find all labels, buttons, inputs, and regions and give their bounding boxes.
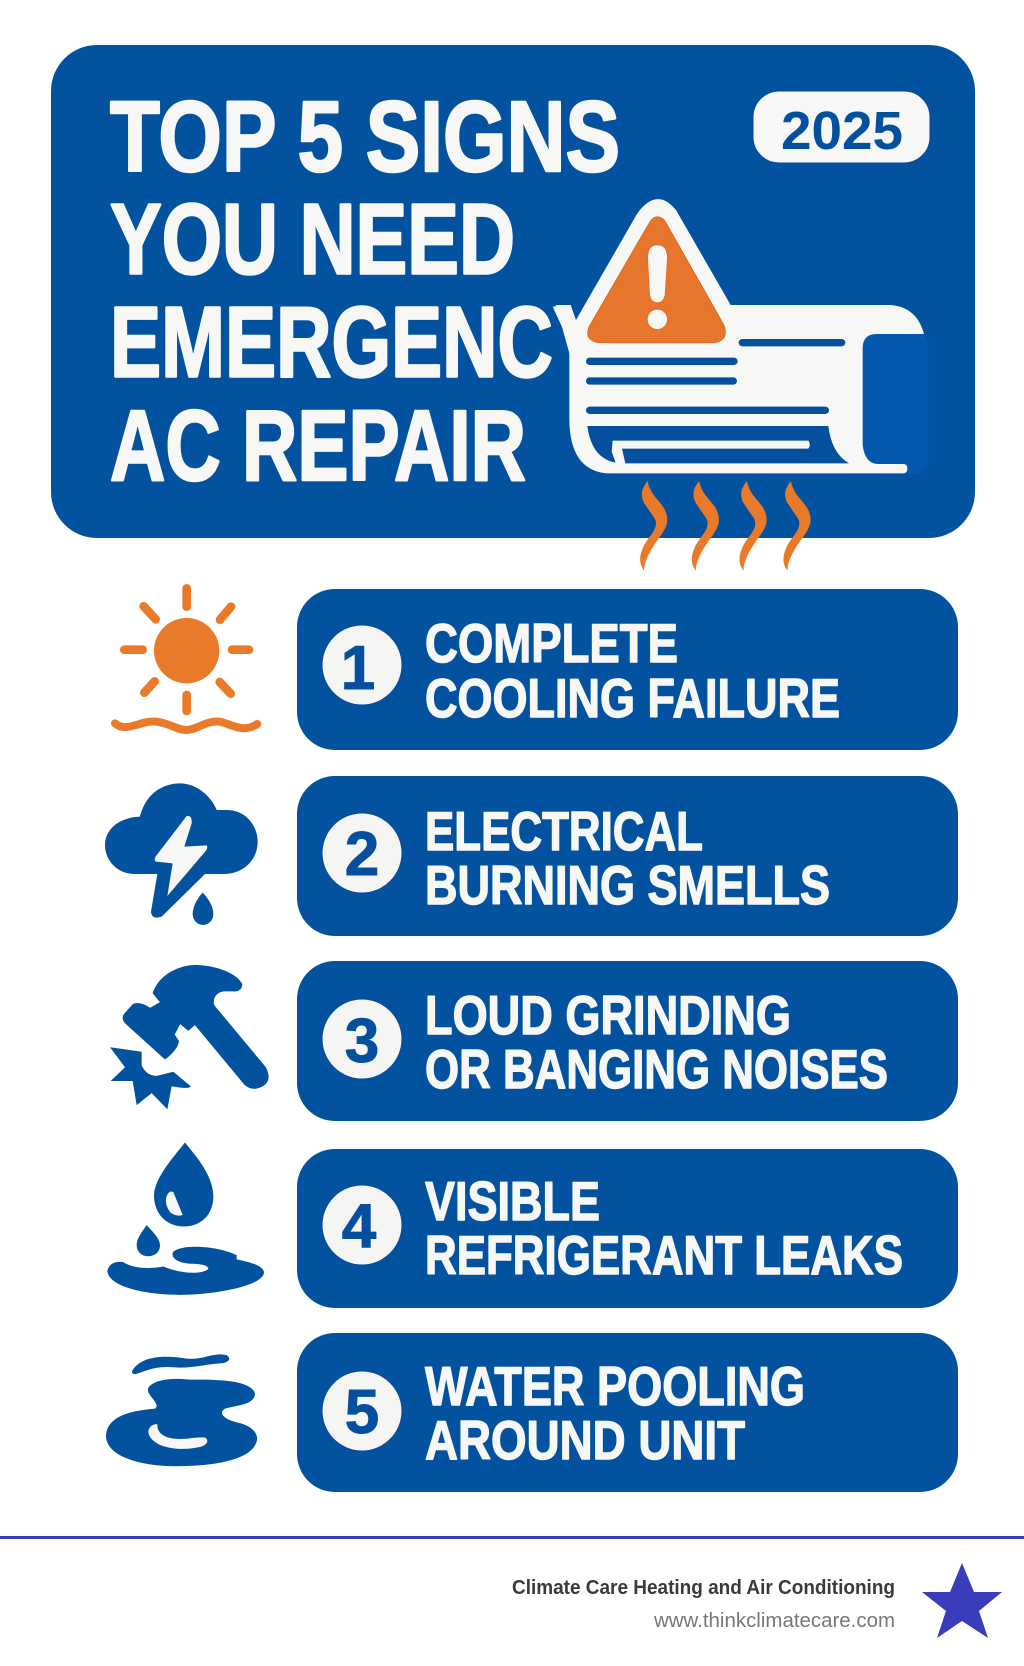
panel: sign 4: REFRIGERANT LEAKS [425, 1224, 903, 1286]
panel: sign 1: 1 [341, 634, 375, 703]
panel: sign 4 [297, 1149, 958, 1308]
title: TOP 5 SIGNS [110, 81, 620, 193]
year badge: 2025 [781, 101, 903, 161]
icon: water pool [106, 1354, 257, 1466]
icon: hammer striking [110, 966, 268, 1109]
panel: sign 3: 3 [345, 1007, 379, 1076]
panel: sign 4: 4 [342, 1192, 377, 1261]
panel: sign 5: 5 [345, 1378, 379, 1447]
panel: sign 1 [297, 589, 958, 750]
panel: sign 2: BURNING SMELLS [425, 854, 830, 916]
icon: storm cloud with lightning [105, 783, 258, 925]
panel: sign 3 [297, 961, 958, 1121]
title: YOU NEED [110, 184, 515, 296]
panel: sign 1: COMPLETE [425, 612, 678, 674]
panel: sign 3: LOUD GRINDING [425, 984, 791, 1046]
icon: sun over heat waves [115, 588, 257, 730]
icon: air conditioner with warning triangle [556, 199, 928, 571]
panel: sign 4: VISIBLE [425, 1170, 600, 1232]
panel: sign 5: AROUND UNIT [425, 1409, 745, 1471]
year badge [753, 91, 930, 163]
panel: sign 2: ELECTRICAL [425, 800, 703, 862]
icon: star logo [922, 1563, 1002, 1638]
panel: hero header [51, 45, 975, 571]
panel: sign 5: WATER POOLING [425, 1355, 805, 1417]
footer company name: Climate Care Heating and Air Conditioning [512, 1577, 895, 1599]
panel: sign 1: COOLING FAILURE [425, 667, 840, 729]
title: EMERGENCY [110, 286, 604, 398]
title [110, 81, 620, 502]
title: AC REPAIR [110, 390, 526, 502]
panel: sign 3: OR BANGING NOISES [425, 1038, 888, 1100]
footer website: www.thinkclimatecare.com [653, 1610, 895, 1632]
panel: sign 2 [297, 776, 958, 936]
panel: sign 2: 2 [345, 820, 379, 889]
panel: sign 5 [297, 1333, 958, 1492]
icon: refrigerant drops and puddle [107, 1142, 264, 1295]
